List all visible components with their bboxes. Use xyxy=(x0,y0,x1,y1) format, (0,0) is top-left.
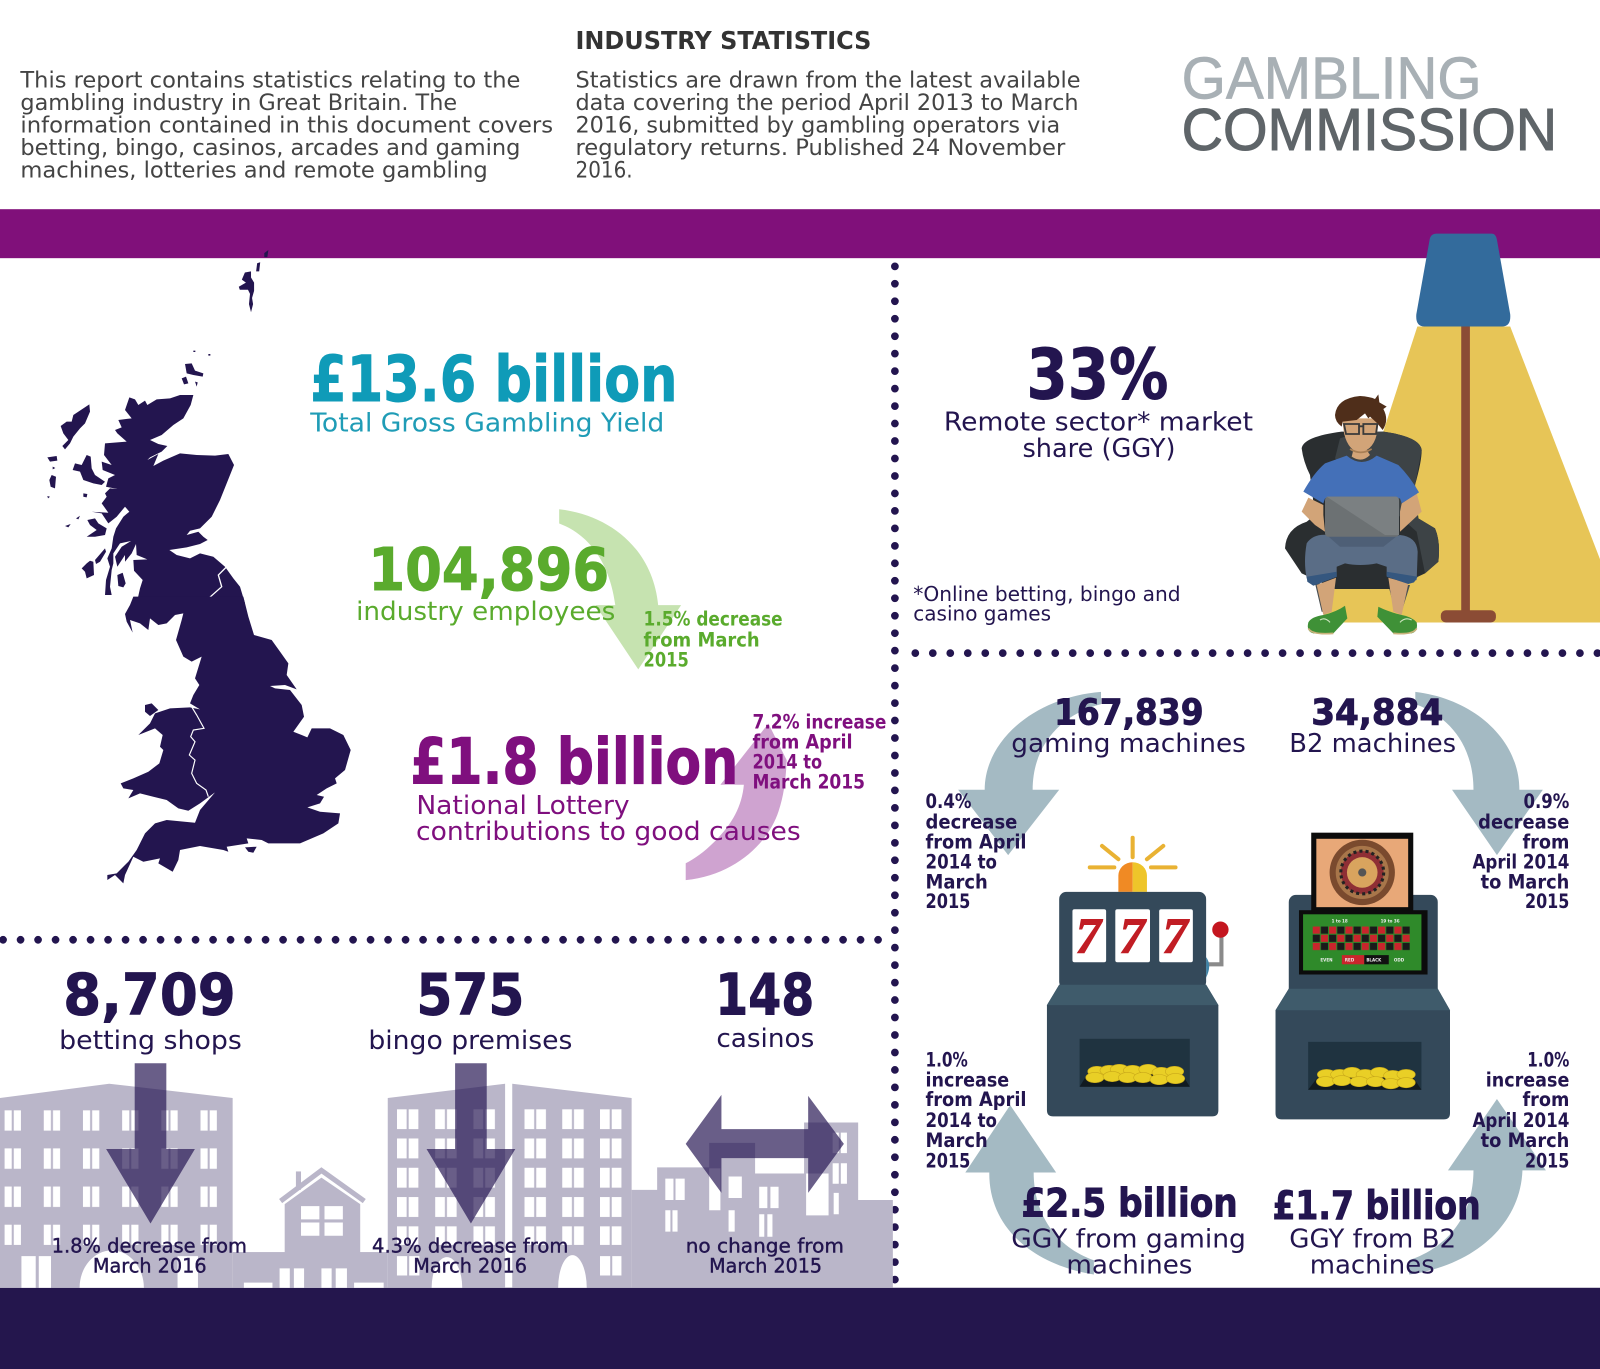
callout: lottery change: 7.2% increase xyxy=(753,710,886,733)
stat: GGY from gaming machines: GGY from gaming xyxy=(1011,1224,1246,1254)
callout: lottery change xyxy=(753,710,886,793)
callout: B2 GGY change: increase xyxy=(1486,1069,1569,1092)
illustration: slot machine: 7 xyxy=(1119,909,1147,965)
callout: employees change: 2015 xyxy=(644,648,689,671)
heading: industry statistics: INDUSTRY STATISTICS xyxy=(576,26,871,55)
arrow: gaming GGY increase xyxy=(965,1105,1094,1275)
chair legs xyxy=(1315,583,1410,612)
stat: betting shops: betting shops xyxy=(59,1026,242,1056)
roulette monitor xyxy=(1311,833,1413,912)
stat: gaming machines xyxy=(1011,693,1246,759)
callout: B2 machines change: 0.9% xyxy=(1523,790,1569,813)
arrow: betting shops down xyxy=(106,1063,195,1223)
map: Orkney xyxy=(182,351,210,387)
callout: B2 machines change: decrease xyxy=(1478,811,1569,834)
logo: Gambling Commission: GAMBLING xyxy=(1182,44,1482,111)
text block: report intro: gambling industry in Great Britain. The xyxy=(20,90,457,116)
cabinet xyxy=(1289,895,1438,997)
stat: casinos: casinos xyxy=(716,1024,814,1054)
callout: bingo premises change: 4.3% decrease from xyxy=(372,1234,568,1257)
building: left xyxy=(0,1084,233,1288)
illustration: slot machine: 7 xyxy=(1162,909,1190,965)
arrow: employees decrease xyxy=(559,509,681,669)
illustration: B2 roulette machine: 19 to 36 xyxy=(1381,918,1400,923)
stat: total GGY: Total Gross Gambling Yield xyxy=(309,409,664,439)
arrow: B2 GGY increase xyxy=(1409,1099,1546,1275)
lower legs xyxy=(1317,578,1408,615)
text block: data sources: 2016. xyxy=(576,157,633,183)
callout: gaming machines change: March xyxy=(926,870,988,893)
text block: data sources: data covering the period April 2013 to March xyxy=(576,90,1079,116)
coin tray xyxy=(1080,1039,1190,1087)
callout: B2 machines change xyxy=(1472,790,1569,913)
stat: total GGY: £13.6 billion xyxy=(310,342,678,416)
text block: data sources xyxy=(576,67,1081,183)
illustration: B2 roulette machine: BLACK xyxy=(1366,958,1382,963)
callout: gaming GGY change xyxy=(926,1048,1027,1172)
illustration: person with laptop in armchair xyxy=(1285,394,1439,634)
map: Inner Hebrides xyxy=(65,455,126,587)
illustration: B2 roulette machine: EVEN xyxy=(1320,958,1333,963)
callout: gaming machines change: from April xyxy=(926,830,1027,853)
callout: employees change: from March xyxy=(644,629,760,652)
dotted dividers xyxy=(3,266,1600,1282)
shirt xyxy=(1303,456,1419,503)
callout: gaming machines change xyxy=(926,790,1027,913)
callout: gaming GGY change: increase xyxy=(926,1069,1009,1092)
stat: gaming machines: 167,839 xyxy=(1054,693,1204,734)
illustration: skyline xyxy=(0,1084,893,1288)
trousers xyxy=(1305,535,1418,585)
stat: GGY from B2 machines: GGY from B2 xyxy=(1289,1224,1456,1254)
building: centre block xyxy=(388,1084,632,1288)
map: Shetland xyxy=(239,250,268,312)
footnote: remote definition xyxy=(913,582,1181,625)
reels xyxy=(1072,909,1106,962)
logo: Gambling Commission xyxy=(1182,44,1557,163)
callout: B2 GGY change: 2015 xyxy=(1525,1149,1569,1172)
stat: remote market share xyxy=(944,335,1253,464)
stat: bingo premises xyxy=(368,962,572,1056)
callout: gaming GGY change: 2014 to xyxy=(926,1109,997,1132)
text block: data sources: regulatory returns. Published 24 November xyxy=(576,135,1066,161)
map: England and Wales xyxy=(107,597,351,883)
beacon xyxy=(1118,862,1133,892)
callout: B2 machines change: from xyxy=(1522,830,1569,853)
stat: total GGY xyxy=(309,342,678,439)
callout: B2 GGY change: to March xyxy=(1481,1129,1569,1152)
hair xyxy=(1335,394,1387,430)
callout: gaming GGY change: 2015 xyxy=(926,1149,970,1172)
stat: remote market share: 33% xyxy=(1027,335,1168,415)
stat: National Lottery contributions: contributions to good causes xyxy=(416,817,801,847)
stat: GGY from gaming machines xyxy=(1011,1181,1246,1280)
callout: B2 machines change: April 2014 xyxy=(1472,850,1569,873)
callout: casinos change: no change from xyxy=(686,1234,844,1257)
stat: remote market share: share (GGY) xyxy=(1022,434,1176,464)
callout: lottery change: 2014 to xyxy=(753,750,822,773)
coin tray xyxy=(1308,1042,1421,1090)
illustration: slot machine: 7 xyxy=(1076,909,1104,965)
stat: industry employees xyxy=(356,535,615,627)
stat: casinos xyxy=(715,962,814,1054)
callout: B2 GGY change xyxy=(1472,1048,1569,1172)
callout: betting shops change: 1.8% decrease from xyxy=(52,1234,247,1257)
callout: gaming machines change: 2015 xyxy=(926,890,970,913)
callout: B2 machines change: to March xyxy=(1481,870,1569,893)
arrow: casinos no change xyxy=(686,1095,844,1193)
stat: National Lottery contributions: National Lottery xyxy=(416,791,630,821)
map: Scotland xyxy=(47,351,245,616)
callout: gaming machines change: decrease xyxy=(926,811,1017,834)
stat: National Lottery contributions xyxy=(410,724,801,847)
map: Welsh border xyxy=(189,704,208,797)
cabinet xyxy=(1059,892,1206,989)
arms xyxy=(1302,493,1422,532)
text block: report intro xyxy=(19,67,553,183)
stat: remote market share: Remote sector* market xyxy=(944,408,1253,438)
arrow: gaming machines decrease xyxy=(958,692,1101,855)
stat: GGY from B2 machines: £1.7 billion xyxy=(1272,1184,1481,1229)
callout: casinos change xyxy=(686,1234,844,1277)
footer bar xyxy=(0,1288,1600,1369)
stat: B2 machines: B2 machines xyxy=(1289,729,1456,759)
stat: GGY from gaming machines: machines xyxy=(1066,1250,1192,1280)
callout: gaming machines change: 0.4% xyxy=(926,790,971,813)
illustration: B2 roulette machine: ODD xyxy=(1394,958,1405,963)
lever xyxy=(1206,934,1221,964)
callout: bingo premises change xyxy=(372,1234,568,1277)
purple banner xyxy=(0,209,1600,258)
stat: industry employees: industry employees xyxy=(356,597,615,627)
callout: B2 GGY change: from xyxy=(1522,1088,1569,1111)
stat: bingo premises: 575 xyxy=(416,962,524,1028)
callout: B2 GGY change: 1.0% xyxy=(1527,1048,1569,1071)
arrow: bingo premises down xyxy=(427,1063,515,1223)
arrow: lottery increase xyxy=(686,723,787,880)
map: Isle of Wight xyxy=(245,847,257,853)
laptop xyxy=(1325,497,1399,537)
neck and face xyxy=(1343,418,1378,460)
stat: GGY from B2 machines: machines xyxy=(1310,1250,1435,1280)
stat: B2 machines: 34,884 xyxy=(1311,693,1443,734)
coins xyxy=(1086,1064,1185,1085)
chair xyxy=(1285,432,1439,589)
illustration: B2 roulette machine xyxy=(1276,833,1450,1119)
callout: betting shops change xyxy=(52,1234,247,1277)
text block: report intro: This report contains statistics relating to the xyxy=(19,67,520,93)
betting table xyxy=(1299,910,1428,975)
illustration: B2 roulette machine: RED xyxy=(1345,958,1355,963)
stat: GGY from B2 machines xyxy=(1272,1184,1481,1280)
illustration: slot machine xyxy=(1047,838,1229,1116)
callout: gaming machines change: 2014 to xyxy=(926,850,997,873)
arrow: B2 machines decrease xyxy=(1415,692,1543,855)
map: Scottish border xyxy=(183,567,226,616)
callout: betting shops change: March 2016 xyxy=(93,1254,207,1277)
callout: gaming GGY change: 1.0% xyxy=(926,1048,968,1071)
callout: gaming GGY change: March xyxy=(926,1129,988,1152)
map: Anglesey xyxy=(145,703,158,716)
illustration: B2 roulette machine: 1 to 18 xyxy=(1332,918,1348,923)
callout: employees change xyxy=(644,608,783,671)
stat: bingo premises: bingo premises xyxy=(368,1026,572,1056)
text block: report intro: betting, bingo, casinos, arcades and gaming xyxy=(20,135,520,161)
building: house xyxy=(233,1170,388,1288)
callout: bingo premises change: March 2016 xyxy=(413,1254,527,1277)
building: casino block xyxy=(632,1122,893,1288)
text block: data sources: Statistics are drawn from the latest available xyxy=(576,67,1081,93)
text block: report intro: information contained in this document covers xyxy=(20,112,553,138)
callout: casinos change: March 2015 xyxy=(709,1254,822,1277)
map: Great Britain xyxy=(47,250,351,883)
beacon rays xyxy=(1090,838,1176,867)
callout: gaming GGY change: from April xyxy=(926,1088,1027,1111)
stat: casinos: 148 xyxy=(715,962,814,1028)
stat: betting shops xyxy=(59,962,242,1056)
callout: B2 machines change: 2015 xyxy=(1525,890,1569,913)
callout: B2 GGY change: April 2014 xyxy=(1472,1109,1569,1132)
stat: industry employees: 104,896 xyxy=(368,535,609,604)
text block: report intro: machines, lotteries and remote gambling xyxy=(20,157,488,183)
callout: lottery change: March 2015 xyxy=(753,770,865,793)
footnote: remote definition: *Online betting, bingo and xyxy=(913,582,1181,606)
stat: gaming machines: gaming machines xyxy=(1011,729,1246,759)
map: Outer Hebrides xyxy=(47,404,90,498)
callout: employees change: 1.5% decrease xyxy=(644,608,783,631)
coins xyxy=(1316,1067,1415,1089)
text block: data sources: 2016, submitted by gambling operators via xyxy=(576,112,1060,138)
illustration: floor lamp xyxy=(1321,234,1600,622)
callout: lottery change: from April xyxy=(753,730,853,753)
footnote: remote definition: casino games xyxy=(913,601,1051,625)
stat: B2 machines xyxy=(1289,693,1456,759)
glasses xyxy=(1344,424,1377,434)
shoes xyxy=(1308,606,1417,633)
stat: National Lottery contributions: £1.8 billion xyxy=(410,724,738,798)
stat: GGY from gaming machines: £2.5 billion xyxy=(1021,1181,1238,1226)
stat: betting shops: 8,709 xyxy=(63,962,236,1028)
logo: Gambling Commission: COMMISSION xyxy=(1182,96,1557,163)
